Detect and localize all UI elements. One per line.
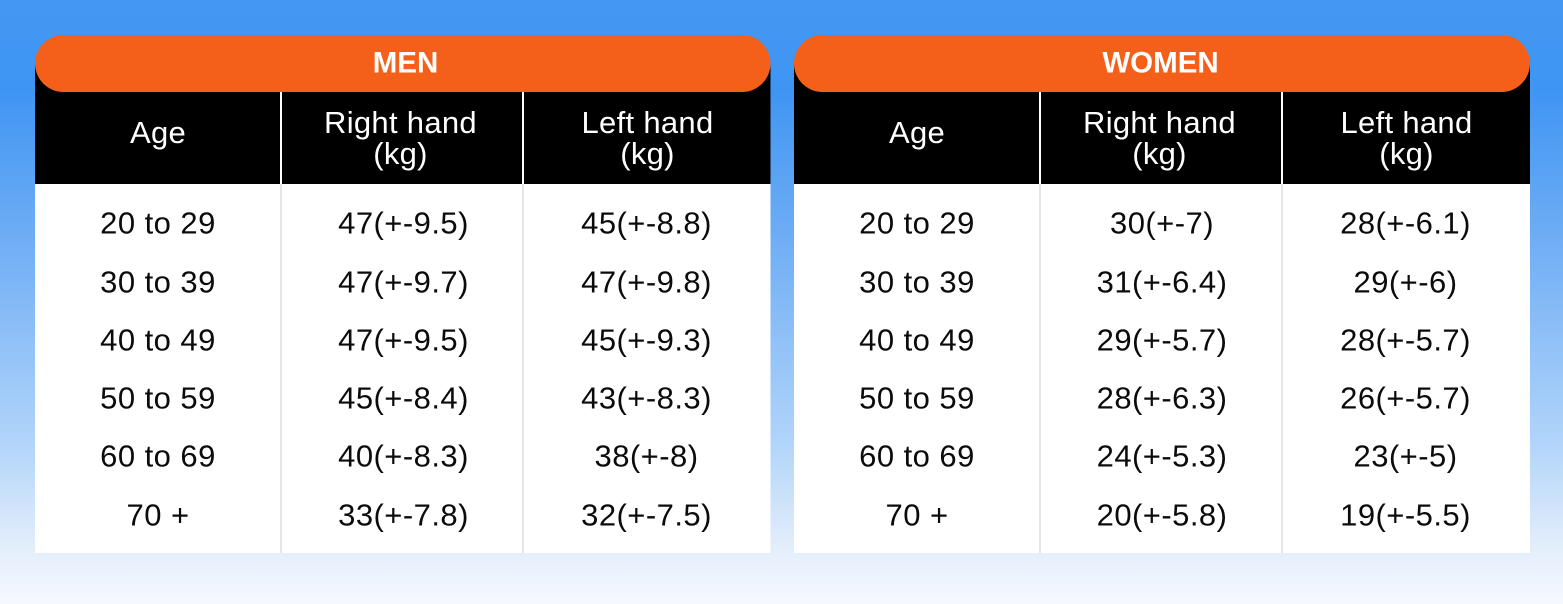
column: age values: 40 to 49 bbox=[100, 322, 216, 358]
column: age values: 20 to 29 bbox=[859, 206, 975, 240]
header band: women bbox=[794, 63, 1530, 184]
column: right hand values bbox=[1097, 206, 1227, 532]
column heading: left hand: (kg) bbox=[620, 136, 675, 171]
column: age values: 30 to 39 bbox=[100, 264, 216, 300]
column: right hand values: 30(+-7) bbox=[1110, 206, 1214, 240]
table body: women bbox=[794, 184, 1530, 553]
column: left hand values: 23(+-5) bbox=[1354, 438, 1457, 474]
column: right hand values: 24(+-5.3) bbox=[1097, 438, 1227, 474]
column: right hand values bbox=[338, 206, 469, 532]
column heading: age: Age bbox=[889, 115, 945, 150]
column heading: right hand: (kg) bbox=[1132, 136, 1187, 171]
table body: men bbox=[35, 184, 770, 553]
column heading: left hand: Left hand bbox=[1341, 105, 1472, 140]
column heading: right hand: Right hand bbox=[324, 105, 477, 140]
panel: women table bbox=[794, 35, 1530, 553]
column: left hand values: 26(+-5.7) bbox=[1340, 380, 1471, 416]
header band: men bbox=[35, 63, 770, 184]
column: age values: 30 to 39 bbox=[859, 264, 975, 300]
column: age values: 50 to 59 bbox=[859, 380, 975, 416]
column: age values bbox=[100, 206, 216, 532]
column: age values: 70 + bbox=[126, 498, 190, 532]
column: left hand values: 45(+-8.8) bbox=[581, 206, 712, 240]
column: right hand values: 33(+-7.8) bbox=[338, 498, 469, 532]
column: right hand values: 47(+-9.7) bbox=[338, 264, 469, 300]
column: left hand values: 28(+-5.7) bbox=[1340, 322, 1471, 358]
column: left hand values: 32(+-7.5) bbox=[581, 498, 712, 532]
column heading: age: Age bbox=[130, 115, 186, 150]
column: right hand values: 31(+-6.4) bbox=[1097, 264, 1227, 300]
title pill: men: MEN bbox=[373, 46, 438, 80]
column: right hand values: 29(+-5.7) bbox=[1097, 322, 1227, 358]
panel: men table bbox=[35, 35, 770, 553]
title pill: women bbox=[794, 35, 1530, 92]
column heading: left hand: Left hand bbox=[582, 105, 713, 140]
column: left hand values: 47(+-9.8) bbox=[581, 264, 712, 300]
column: left hand values bbox=[1340, 206, 1471, 532]
column: right hand values: 28(+-6.3) bbox=[1097, 380, 1227, 416]
column: right hand values: 20(+-5.8) bbox=[1097, 498, 1227, 532]
column: left hand values: 28(+-6.1) bbox=[1340, 206, 1471, 240]
column: age values bbox=[859, 206, 975, 532]
column: age values: 40 to 49 bbox=[859, 322, 975, 358]
column: left hand values: 45(+-9.3) bbox=[581, 322, 712, 358]
column: right hand values: 40(+-8.3) bbox=[338, 438, 469, 474]
column heading: right hand: (kg) bbox=[373, 136, 428, 171]
column heading: right hand: Right hand bbox=[1083, 105, 1236, 140]
column: right hand values: 47(+-9.5) bbox=[338, 322, 469, 358]
column: age values: 20 to 29 bbox=[100, 206, 216, 240]
column: age values: 60 to 69 bbox=[100, 438, 216, 474]
title pill: women: WOMEN bbox=[1102, 46, 1219, 80]
column: left hand values: 38(+-8) bbox=[595, 438, 698, 474]
column: age values: 70 + bbox=[886, 498, 948, 532]
column: age values: 60 to 69 bbox=[859, 438, 975, 474]
column: age values: 50 to 59 bbox=[100, 380, 216, 416]
column heading: left hand: (kg) bbox=[1379, 136, 1434, 171]
column: left hand values: 43(+-8.3) bbox=[581, 380, 712, 416]
column: left hand values: 19(+-5.5) bbox=[1340, 498, 1471, 532]
column: right hand values: 45(+-8.4) bbox=[338, 380, 469, 416]
column: left hand values bbox=[581, 206, 712, 532]
column: left hand values: 29(+-6) bbox=[1354, 264, 1457, 300]
column: right hand values: 47(+-9.5) bbox=[338, 206, 469, 240]
title pill: men bbox=[35, 35, 770, 92]
